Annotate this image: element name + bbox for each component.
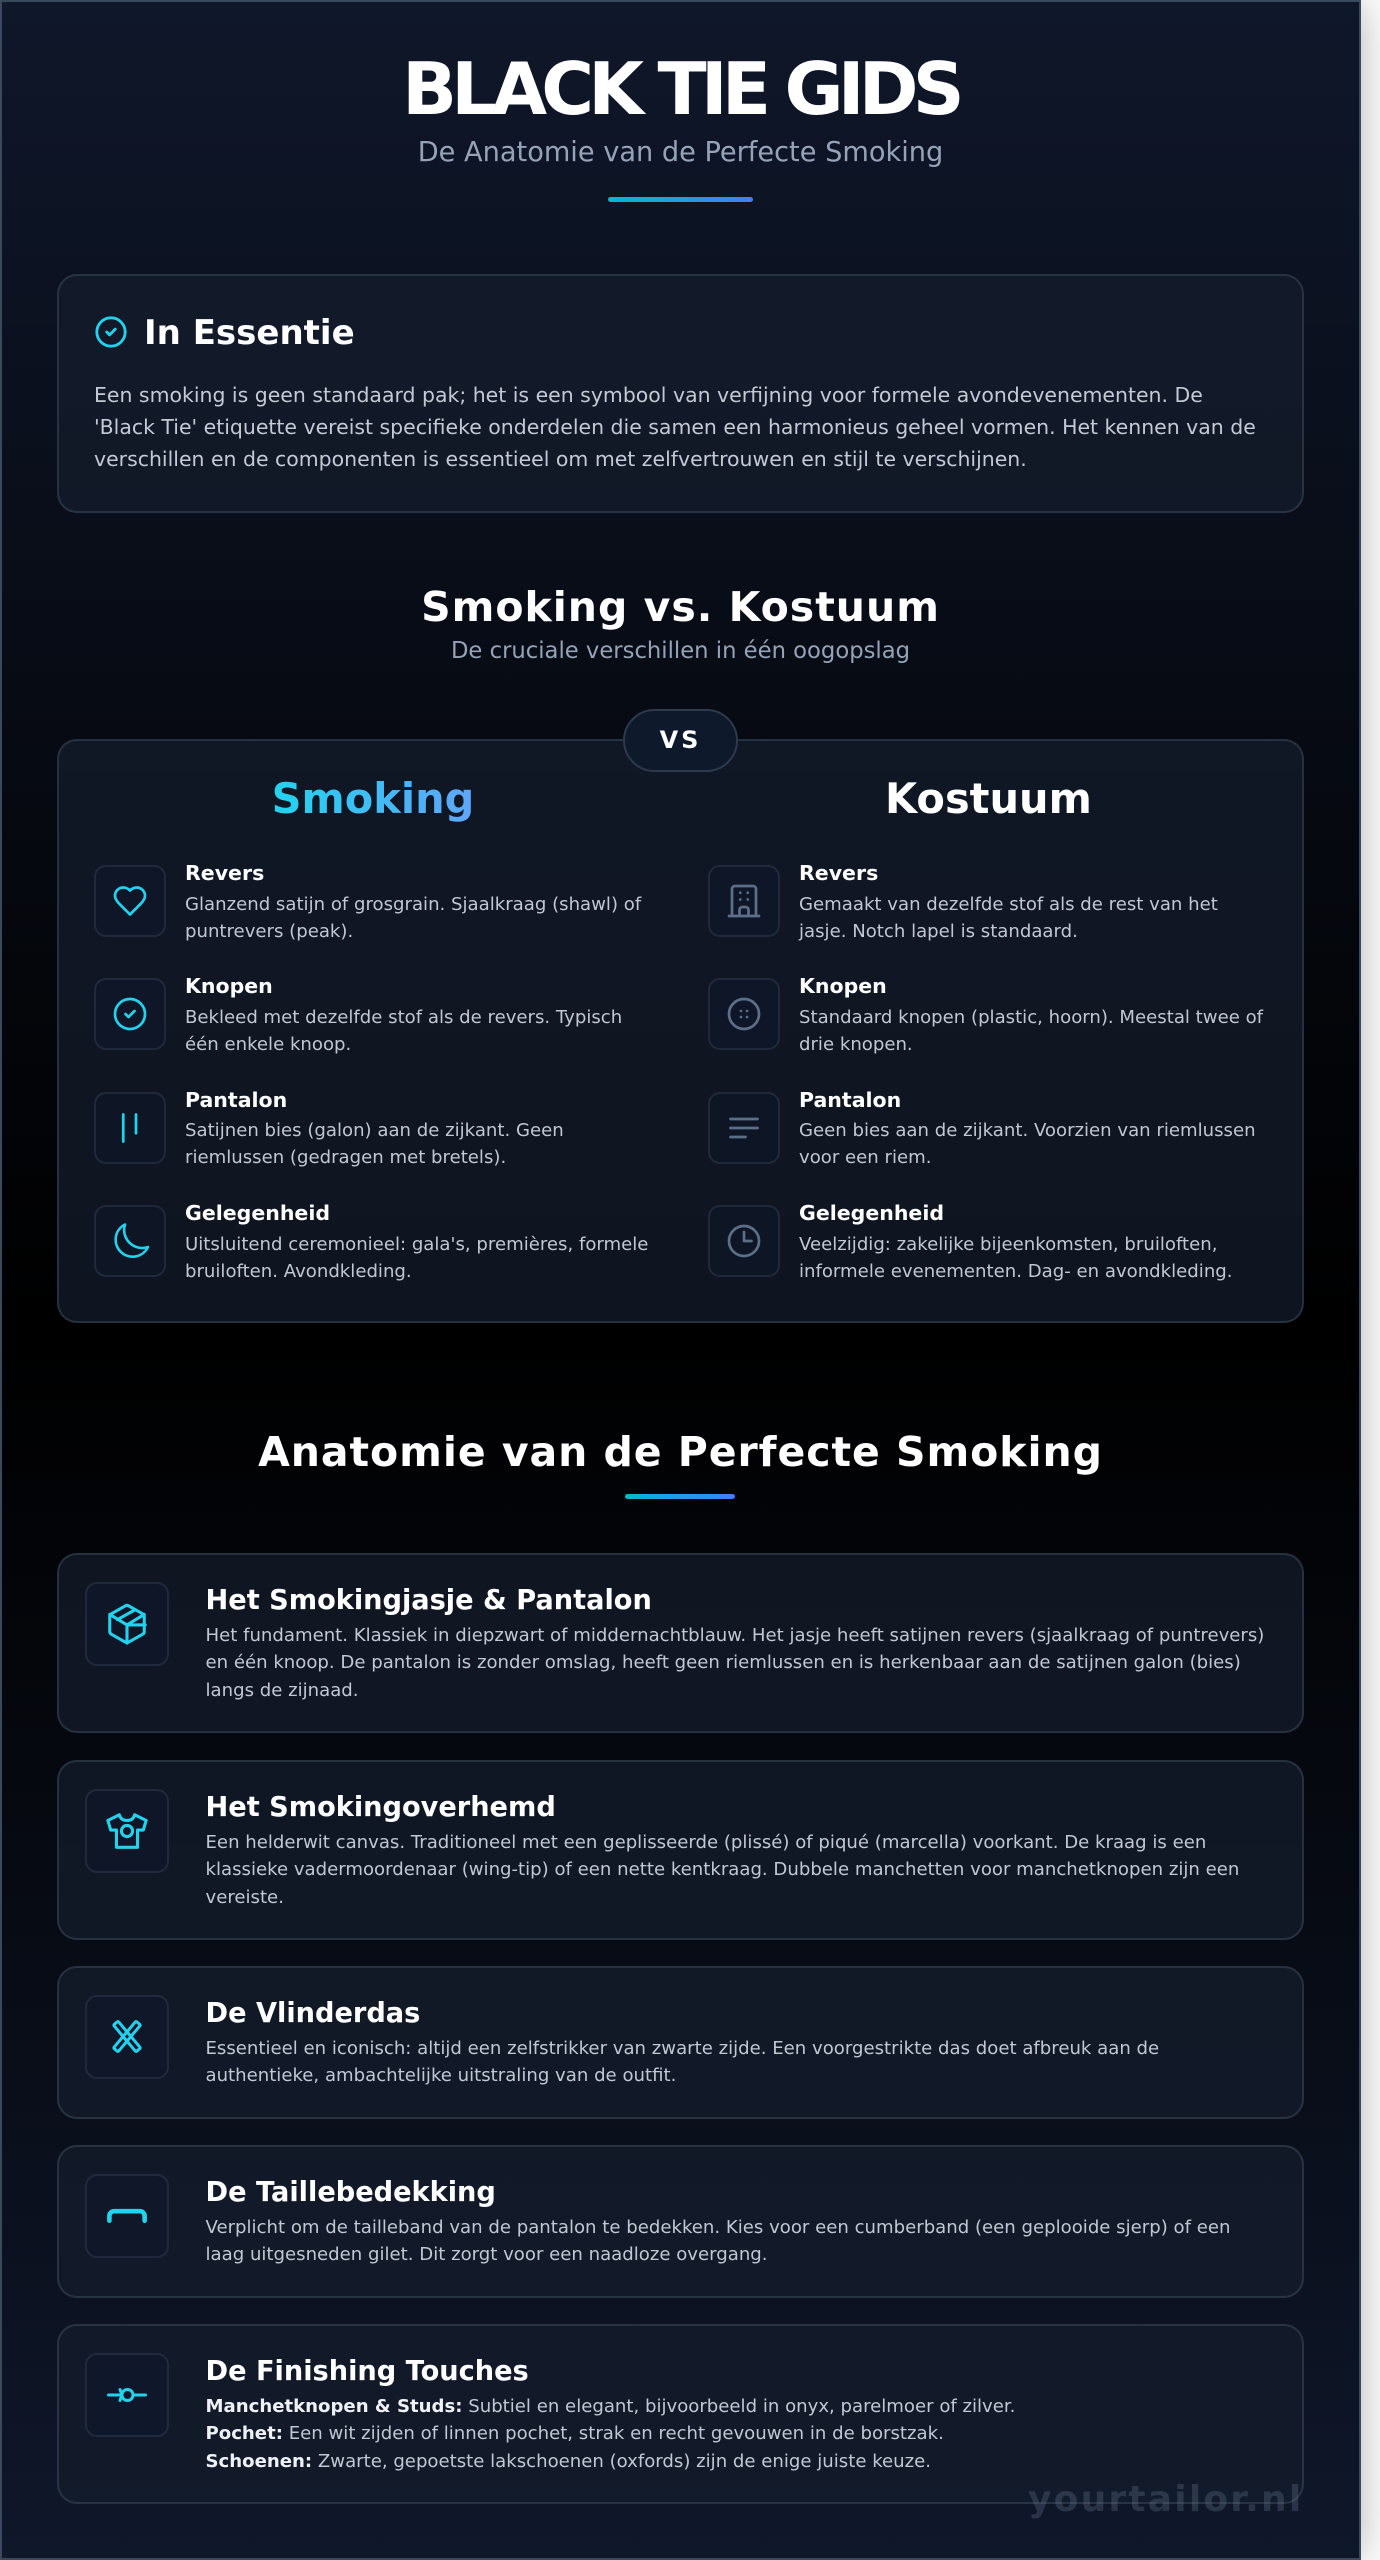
card text: Een helderwit canvas. Traditioneel met een geplisseerde (plissé) of piqué (marcella) voorkant. De kraag is een bbox=[206, 1832, 1206, 1853]
description: Veelzijdig: zakelijke bijeenkomsten, bruiloften, bbox=[799, 1234, 1217, 1254]
icon: check circle bbox=[94, 978, 166, 1050]
description bbox=[185, 1234, 648, 1282]
card text bbox=[206, 1832, 1239, 1908]
label: Revers bbox=[799, 861, 878, 885]
description: drie knopen. bbox=[799, 1034, 913, 1055]
label: Knopen bbox=[185, 974, 273, 998]
description: Satijnen bies (galon) aan de zijkant. Geen bbox=[185, 1120, 564, 1141]
card title: De Finishing Touches bbox=[206, 2356, 529, 2386]
label: Pantalon bbox=[799, 1088, 901, 1112]
card text: Het fundament. Klassiek in diepzwart of middernachtblauw. Het jasje heeft satijnen revers (sjaalkraag of puntrevers) bbox=[206, 1625, 1264, 1646]
description: Standaard knopen (plastic, hoorn). Meestal twee of bbox=[799, 1007, 1263, 1028]
card text: Manchetknopen & Studs: Subtiel en elegant, bijvoorbeeld in onyx, parelmoer of zilver. bbox=[206, 2396, 1015, 2417]
text: introduction bbox=[94, 383, 1256, 471]
smoking row: revers bbox=[94, 861, 642, 942]
description bbox=[799, 1120, 1256, 1168]
card text: Schoenen: Zwarte, gepoetste lakschoenen (oxfords) zijn de enige juiste keuze. bbox=[206, 2451, 931, 2472]
heading: in essentie: In Essentie bbox=[144, 313, 355, 353]
header divider bbox=[608, 197, 753, 202]
label: Pantalon bbox=[185, 1088, 287, 1112]
icon: box bbox=[85, 1582, 169, 1666]
description: riemlussen (gedragen met bretels). bbox=[185, 1147, 506, 1168]
description: informele evenementen. Dag- en avondkleding. bbox=[799, 1261, 1233, 1282]
smoking row: pantalon bbox=[94, 1088, 564, 1168]
icon: crossed tools bbox=[85, 1995, 169, 2079]
column title: kostuum: Kostuum bbox=[885, 774, 1092, 823]
kostuum row: gelegenheid bbox=[708, 1201, 1233, 1282]
description bbox=[185, 1007, 622, 1055]
subheading: comparison: De cruciale verschillen in één oogopslag bbox=[451, 638, 910, 664]
description bbox=[185, 894, 642, 942]
description: Uitsluitend ceremonieel: gala's, premières, formele bbox=[185, 1234, 648, 1254]
description: jasje. Notch lapel is standaard. bbox=[799, 921, 1078, 942]
text: introduction: Een smoking is geen standaard pak; het is een symbool van verfijning voor formele avondevenementen. De bbox=[94, 383, 1203, 407]
description bbox=[798, 894, 1218, 942]
subtitle: De Anatomie van de Perfecte Smoking bbox=[418, 137, 943, 168]
text: introduction: verschillen en de componenten is essentieel om met zelfvertrouwen en stijl te verschijnen. bbox=[94, 447, 1027, 471]
card text: Pochet: Een wit zijden of linnen pochet, strak en recht gevouwen in de borstzak. bbox=[206, 2423, 944, 2444]
kostuum row: pantalon bbox=[708, 1088, 1256, 1168]
card text: Essentieel en iconisch: altijd een zelfstrikker van zwarte zijde. Een voorgestrikte das doet afbreuk aan de bbox=[206, 2038, 1159, 2059]
description bbox=[799, 1234, 1233, 1282]
card text bbox=[206, 2038, 1159, 2086]
icon: building bbox=[708, 865, 780, 937]
card: smokingoverhemd bbox=[57, 1760, 1304, 1940]
description bbox=[185, 1120, 564, 1168]
kostuum row: revers bbox=[708, 861, 1218, 942]
vs badge bbox=[623, 709, 738, 772]
card text: en één knoop. De pantalon is zonder omslag, heeft geen riemlussen en is herkenbaar aan de satijnen galon (bies) bbox=[206, 1652, 1241, 1673]
panel: in essentie bbox=[57, 274, 1304, 513]
card text: klassieke vadermoordenaar (wing-tip) of een nette kentkraag. Dubbele manchetten voor manchetknopen zijn een bbox=[206, 1859, 1239, 1880]
label: Gelegenheid bbox=[799, 1201, 944, 1225]
icon: cufflink bbox=[85, 2353, 169, 2437]
card text bbox=[206, 1625, 1264, 1701]
icon: shirt bbox=[85, 1789, 169, 1873]
description: Bekleed met dezelfde stof als de revers. Typisch bbox=[185, 1007, 622, 1028]
card title: Het Smokingjasje & Pantalon bbox=[206, 1584, 652, 1616]
description: voor een riem. bbox=[799, 1147, 932, 1168]
heading: smoking vs kostuum: Smoking vs. Kostuum bbox=[421, 583, 940, 631]
description: bruiloften. Avondkleding. bbox=[185, 1261, 412, 1282]
kostuum row: knopen bbox=[708, 974, 1264, 1055]
description bbox=[799, 1007, 1264, 1055]
label: Gelegenheid bbox=[185, 1201, 330, 1225]
smoking row: gelegenheid bbox=[94, 1201, 648, 1282]
icon: waistband bbox=[85, 2174, 169, 2258]
description: Geen bies aan de zijkant. Voorzien van riemlussen bbox=[799, 1120, 1256, 1141]
icon: moon bbox=[94, 1205, 166, 1277]
card: smokingjasje bbox=[57, 1553, 1304, 1733]
icon: check circle bbox=[95, 316, 127, 348]
card text: authentieke, ambachtelijke uitstraling van de outfit. bbox=[206, 2065, 676, 2086]
card title: De Vlinderdas bbox=[206, 1998, 420, 2028]
card text: langs de zijnaad. bbox=[206, 1680, 359, 1701]
panel: comparison bbox=[57, 739, 1304, 1323]
card text: Verplicht om de tailleband van de pantalon te bedekken. Kies voor een cumberband (een geplooide sjerp) of een bbox=[206, 2217, 1230, 2238]
card text: vereiste. bbox=[206, 1887, 284, 1908]
card title: Het Smokingoverhemd bbox=[206, 1792, 556, 1822]
label: Knopen bbox=[799, 974, 887, 998]
smoking row: knopen bbox=[94, 974, 622, 1055]
card: taillebedekking bbox=[57, 2145, 1304, 2298]
description: één enkele knoop. bbox=[185, 1034, 351, 1055]
card text bbox=[206, 2217, 1230, 2265]
description: Gemaakt van dezelfde stof als de rest van het bbox=[799, 894, 1218, 914]
card: finishing touches bbox=[57, 2324, 1304, 2504]
icon: button bbox=[708, 978, 780, 1050]
title: BLACK TIE GIDS bbox=[402, 47, 959, 131]
icon: lines bbox=[708, 1092, 780, 1164]
column title: smoking: Smoking bbox=[272, 774, 474, 823]
icon: stripes bbox=[94, 1092, 166, 1164]
description: Glanzend satijn of grosgrain. Sjaalkraag (shawl) of bbox=[185, 894, 641, 914]
vs badge: VS bbox=[660, 726, 701, 754]
card text: laag uitgesneden gilet. Dit zorgt voor een naadloze overgang. bbox=[206, 2244, 768, 2265]
icon: clock bbox=[708, 1205, 780, 1277]
card text bbox=[206, 2396, 1015, 2472]
icon: heart bbox=[94, 865, 166, 937]
card: vlinderdas bbox=[57, 1966, 1304, 2119]
watermark: yourtailor.nl bbox=[1028, 2479, 1303, 2520]
card title: De Taillebedekking bbox=[206, 2176, 496, 2208]
text: introduction: 'Black Tie' etiquette vereist specifieke onderdelen die samen een harmonieus geheel vormen. Het kennen van de bbox=[94, 415, 1256, 439]
description: puntrevers (peak). bbox=[185, 921, 353, 942]
heading: anatomie: Anatomie van de Perfecte Smoking bbox=[258, 1428, 1103, 1476]
label: Revers bbox=[185, 861, 264, 885]
anatomy divider bbox=[625, 1494, 735, 1499]
